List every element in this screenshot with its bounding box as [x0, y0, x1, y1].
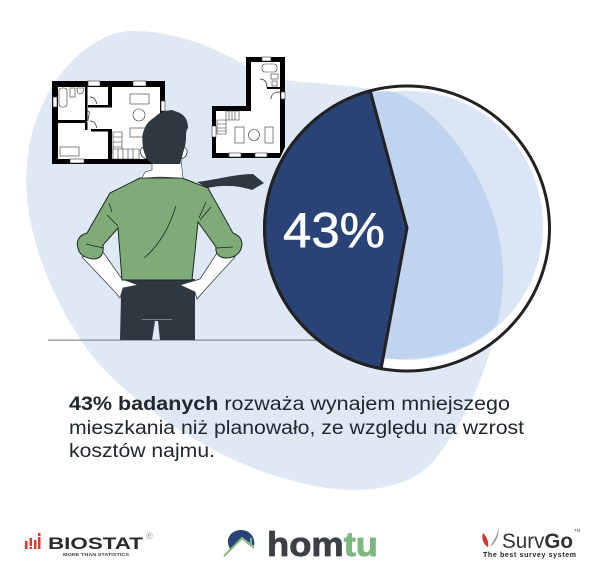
logo: SurvGo: [482, 527, 581, 559]
logo: Biostat: [25, 531, 153, 557]
head hair: [142, 110, 188, 164]
shirt creases: [86, 202, 233, 258]
person seen from behind: [77, 110, 264, 340]
pie base: [264, 86, 550, 371]
background blob: [26, 31, 503, 490]
logo: SurvGo: The best survey system: [483, 552, 576, 559]
pie outline: [264, 86, 550, 371]
caption text: 43% badanych rozważa wynajem mniejszego: [69, 394, 510, 415]
logo: SurvGo: TM: [574, 528, 581, 533]
SurvGo check icon: [482, 527, 499, 547]
homtu roof icon: [224, 530, 254, 556]
ground line: [48, 340, 318, 341]
caption text: kosztów najmu.: [69, 441, 215, 462]
logo: SurvGo: SurvGo: [502, 530, 573, 553]
caption text: mieszkania niż planowało, ze względu na wzrost: [69, 418, 525, 439]
pie inner light disc: [274, 91, 543, 360]
logo: Biostat: ®: [146, 531, 153, 541]
white arms: [82, 252, 235, 299]
pie 43 percent wedge: [264, 91, 407, 369]
ears: [140, 147, 187, 159]
floor plan: left apartment: [52, 81, 165, 164]
logo: Biostat: BIOSTAT: [48, 535, 143, 553]
floor plan: right apartment: [212, 57, 285, 158]
pie chart: [264, 86, 550, 371]
necktie blown sideways: [197, 174, 264, 190]
caption text: [69, 394, 525, 462]
pie blob overlap: [372, 91, 503, 359]
Biostat bars icon: [25, 533, 40, 549]
trousers: [120, 279, 195, 340]
shirt: [77, 178, 242, 280]
logo: homtu: homtu: [267, 526, 378, 564]
pie value label: 43%: [283, 204, 385, 258]
logo: Biostat: MORE THAN STATISTICS: [63, 552, 129, 557]
collar and neck: [142, 160, 183, 178]
